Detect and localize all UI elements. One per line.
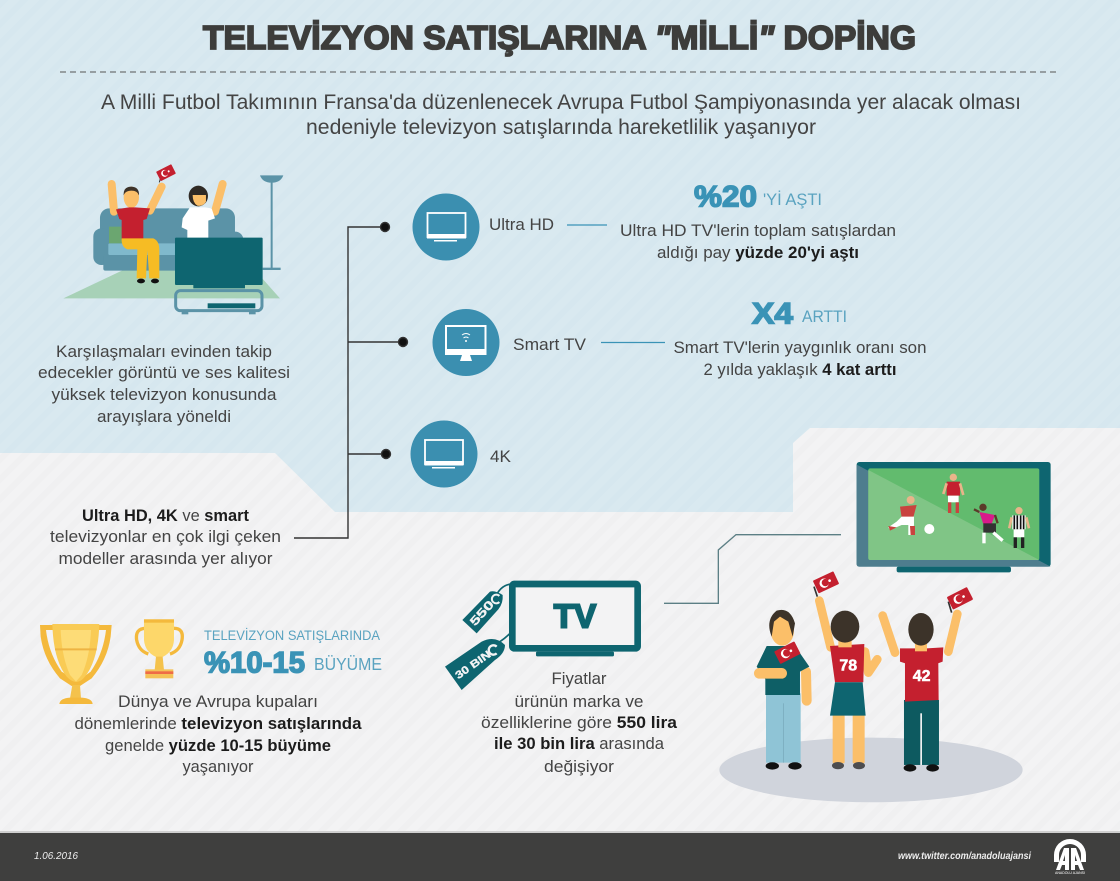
subtitle: A Milli Futbol Takımının Fransa'da düzenlenecek Avrupa Futbol Şampiyonasında yer alacak olması (101, 91, 1021, 114)
icon: large trophy (40, 624, 112, 704)
heading: growth: TELEVİZYON SATIŞLARINDA (204, 628, 380, 643)
logo (1054, 839, 1086, 875)
illustration: family watching TV on the sofa (63, 164, 283, 314)
text: Smart TV growth: Smart TV'lerin yaygınlık oranı son (674, 339, 926, 357)
text: prices: ile 30 bin lira arasında (494, 735, 665, 753)
logo: ANADOLU AJANSI (1055, 871, 1085, 875)
label: Smart TV: Smart TV (513, 336, 586, 354)
stat: X4 (752, 298, 847, 330)
stat: X4: X4 (752, 298, 793, 330)
text: Ultra HD share: Ultra HD TV'lerin toplam satışlardan (620, 222, 896, 240)
illustration: football match on TV and fans (664, 462, 1051, 802)
text: growth during cups: genelde yüzde 10-15 büyüme (105, 737, 331, 755)
stat: %20 (694, 180, 822, 214)
source link: www.twitter.com/anadoluajansi (898, 850, 1032, 862)
heading: growth: BÜYÜME (314, 654, 382, 674)
icon: small trophy (136, 619, 182, 678)
fan: boy (757, 610, 809, 770)
subtitle (101, 91, 1021, 139)
stat: %20: %20 (694, 180, 757, 214)
icon: TV with price tags: TV (554, 598, 596, 635)
date: 1.06.2016 (34, 850, 78, 862)
text: growth during cups: Dünya ve Avrupa kupaları (118, 693, 318, 711)
text: popular models: televizyonlar en çok ilgi çeken (50, 528, 281, 546)
text: Smart TV growth: 2 yılda yaklaşık 4 kat arttı (704, 361, 896, 379)
text: growth during cups: dönemlerinde televizyon satışlarında (74, 715, 362, 733)
text: viewers looking for high-quality TV (38, 343, 290, 426)
text: prices: özelliklerine göre 550 lira (481, 714, 678, 732)
label: Ultra HD: Ultra HD (489, 216, 554, 234)
fan: boy 42 (883, 587, 973, 772)
text: popular models: Ultra HD, 4K ve smart (82, 507, 249, 525)
text: viewers looking for high-quality TV: yüksek televizyon konusunda (52, 386, 277, 404)
text: prices: ürünün marka ve (514, 693, 644, 711)
text: viewers looking for high-quality TV: Karşılaşmaları evinden takip (56, 343, 272, 361)
heading: growth: %10-15 (204, 646, 305, 680)
stat: %20: 'Yİ AŞTI (763, 190, 822, 209)
text: prices: Fiyatlar (552, 670, 607, 688)
text: prices (481, 670, 678, 776)
fan: boy 42: 42 (913, 668, 931, 685)
icon: TV with price tags: 550 (467, 597, 497, 629)
text: growth during cups: yaşanıyor (182, 758, 254, 776)
stat: X4: ARTTI (802, 308, 847, 326)
label: 4K: 4K (490, 448, 511, 466)
subtitle: nedeniyle televizyon satışlarında hareketlilik yaşanıyor (306, 116, 816, 139)
fan: girl 78: 78 (839, 658, 857, 675)
TV screen with players (857, 462, 1051, 572)
title: TELEVİZYON SATIŞLARINA "MİLLİ" DOPİNG (203, 19, 916, 56)
text: prices: değişiyor (544, 758, 615, 776)
text: viewers looking for high-quality TV: arayışlara yöneldi (97, 408, 231, 426)
fan: girl 78 (813, 571, 877, 769)
icon: TV with price tags (445, 584, 638, 690)
text: Ultra HD share (620, 222, 896, 262)
text: popular models (50, 507, 281, 568)
icon: TV with price tags: 30 BIN (453, 649, 493, 682)
connector tree (294, 222, 408, 538)
footer (0, 831, 1120, 881)
icon: 4K (410, 420, 478, 488)
text: Smart TV growth (674, 339, 926, 379)
text: popular models: modeller arasında yer alıyor (58, 550, 273, 568)
heading: growth (204, 628, 382, 680)
text: Ultra HD share: aldığı pay yüzde 20'yi aştı (657, 244, 859, 262)
icon: Ultra HD (412, 194, 480, 260)
icon: Smart TV (432, 309, 500, 376)
text: growth during cups (74, 693, 362, 776)
text: viewers looking for high-quality TV: edecekler görüntü ve ses kalitesi (38, 364, 290, 382)
